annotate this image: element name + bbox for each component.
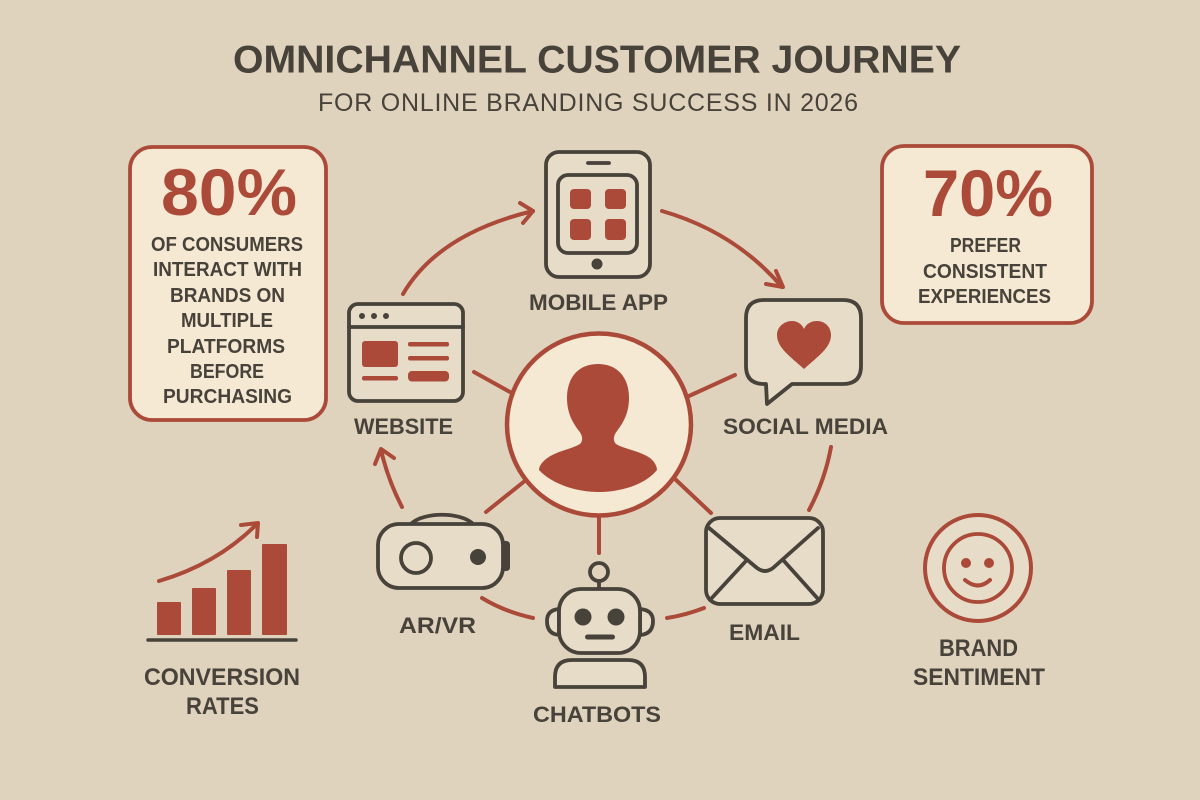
panel: 70% statistic: [882, 146, 1092, 323]
icon: website: [349, 304, 463, 401]
label: brand sentiment: SENTIMENT: [913, 664, 1045, 691]
connector: hub to AR/VR: [486, 480, 526, 512]
icon: heart: [777, 321, 831, 369]
connector: hub to chatbots: [597, 517, 601, 553]
stat description: 70%: [918, 234, 1051, 308]
stat description: 70%: PREFER: [950, 234, 1021, 257]
arrow: AR/VR to website: [375, 449, 402, 507]
icon: customer silhouette: [539, 364, 657, 492]
stat description: 80%: PLATFORMS: [167, 335, 285, 358]
panel: 80% statistic: [130, 147, 326, 420]
icon: AR/VR headset: [378, 515, 510, 588]
stat description: 80%: OF CONSUMERS: [151, 233, 303, 256]
arrow: website to mobile app: [403, 203, 533, 294]
stat description: 80%: INTERACT WITH: [153, 258, 302, 281]
connector: hub to website: [474, 372, 510, 392]
central customer hub: [507, 334, 691, 516]
arrow: mobile app to social media: [662, 211, 783, 287]
label: conversion rates: CONVERSION: [144, 664, 300, 691]
connector: email to chatbots: [667, 608, 704, 618]
label: website: WEBSITE: [354, 414, 453, 439]
stat description: 80%: BEFORE: [190, 360, 264, 383]
stat description: 80%: PURCHASING: [163, 385, 292, 408]
stat description: 80%: [151, 233, 303, 408]
subtitle: FOR ONLINE BRANDING SUCCESS IN 2026: [318, 89, 858, 117]
label: email: EMAIL: [729, 620, 800, 645]
stat number: 70%: 70%: [923, 156, 1053, 230]
stat description: 70%: CONSISTENT: [923, 260, 1047, 283]
stat description: 80%: BRANDS ON: [170, 284, 285, 307]
label: social media: SOCIAL MEDIA: [723, 414, 888, 439]
stat number: 80%: 80%: [161, 155, 297, 229]
arrow: upward trend: [159, 523, 258, 581]
title: OMNICHANNEL CUSTOMER JOURNEY: [233, 38, 961, 82]
icon: mobile app: [546, 152, 650, 277]
connector: social media to email: [809, 447, 831, 510]
label: conversion rates: RATES: [186, 693, 259, 720]
icon: email envelope: [706, 518, 823, 604]
label: chatbots: CHATBOTS: [533, 702, 661, 727]
stat description: 80%: MULTIPLE: [181, 309, 273, 332]
connector: hub to email: [675, 479, 711, 513]
stat description: 70%: EXPERIENCES: [918, 285, 1051, 308]
icon: chatbot: [547, 563, 653, 687]
connector: chatbots to AR/VR: [482, 598, 533, 618]
label: mobile app: MOBILE APP: [529, 290, 668, 315]
chart: conversion rates: [148, 523, 296, 640]
label: AR/VR: AR/VR: [399, 613, 476, 638]
connector: hub to social media: [689, 375, 735, 396]
label: brand sentiment: BRAND: [939, 635, 1018, 662]
icon: social media speech bubble: [746, 300, 861, 404]
label: brand sentiment: [913, 635, 1045, 691]
icon: brand sentiment smiley: [925, 515, 1031, 621]
label: conversion rates: [144, 664, 300, 720]
